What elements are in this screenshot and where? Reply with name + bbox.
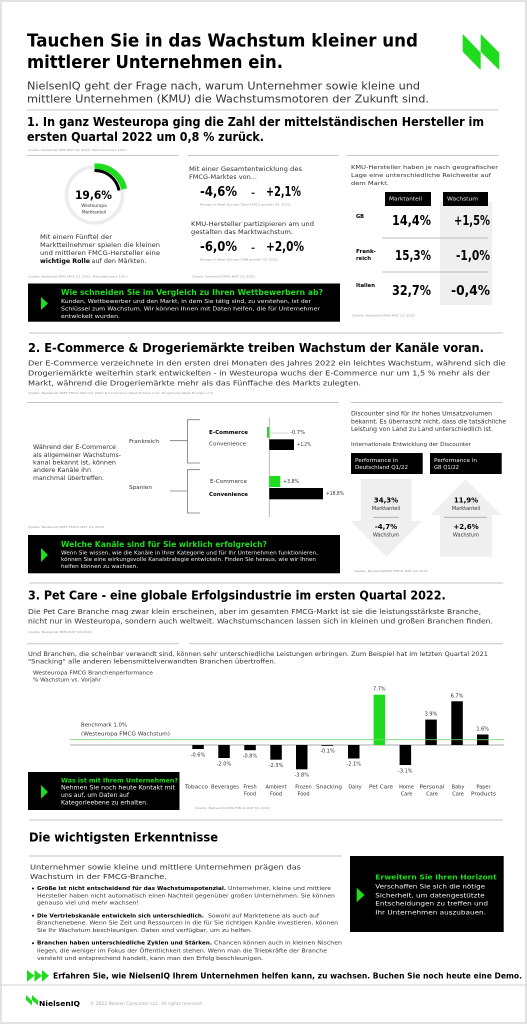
panel: market share donut: Quelle: NielsenIQ RMS MAT Q1 2022, Manufacturers 100+ (28, 274, 129, 278)
text block: takeaways intro (30, 864, 301, 881)
panel: discounters: Marktanteil (372, 506, 400, 512)
callout: channels: können Sie eine wirkungsvolle Kanalstrategie entwickeln. Finden Sie heraus, wie wir Ihnen (61, 557, 316, 563)
chart: sector performance: 3.9% (425, 712, 438, 718)
chart: sector performance: (Westeuropa FMCG Wachstum) (81, 732, 170, 738)
chart: sector performance: -0.8% (243, 753, 257, 759)
panel: FMCG growth ranges: -6,0% (200, 240, 237, 255)
panel: discounters: +2,6% (453, 523, 479, 531)
chart: sector performance: Ambient (265, 784, 287, 790)
panel: country table: KMU-Hersteller haben je nach geografischer (351, 165, 499, 171)
panel: market share donut: Westeuropa (81, 203, 107, 209)
panel: discounters: Internationale Entwicklung der Discounter (351, 442, 472, 448)
chart: sector performance: -2.3% (269, 763, 283, 769)
panel: discounters: Leistung von Land zu Land unterschiedlich ist. (351, 427, 493, 433)
chart: sector performance: Fresh (243, 784, 257, 790)
panel: FMCG growth ranges: +2,1% (266, 185, 301, 200)
list: takeaway 3 (32, 941, 342, 962)
panel: country table: Lage eine unterschiedliche Reichweite auf (351, 173, 492, 179)
chart: channel growth by country: -0.7% (290, 430, 305, 436)
chart: sector performance: Baby (452, 784, 464, 790)
chart: channel growth by country: Frankreich (129, 439, 160, 445)
list: takeaway 2: Die Vertriebskanäle entwickeln sich unterschiedlich. (37, 913, 204, 919)
chart: channel growth by country: +18.8% (326, 491, 344, 497)
chart: sector performance: Products (471, 791, 496, 797)
chart: sector performance: Food (244, 791, 256, 797)
chart: channel growth by country: Convenience (209, 492, 249, 498)
panel: discounters: Discounter sind für ihr hohes Umsatzvolumen (351, 412, 492, 418)
text block: market share: Marktteilnehmer spielen die kleinen (40, 242, 160, 249)
title: Tauchen Sie in das Wachstum kleiner und (27, 32, 418, 52)
panel: discounters: Wachstum (453, 533, 479, 539)
list: takeaway 1: Größe ist nicht entscheidend für das Wachstumspotenzial. (37, 886, 226, 892)
panel: discounters: Performance in (434, 458, 477, 464)
subtitle: NielsenIQ geht der Frage nach, warum Unternehmer sowie kleine und (27, 80, 420, 92)
chart: sector performance: Benchmark 1.0% (81, 723, 127, 729)
source: chart: Quelle: NielsenIQ RMS FMCG MAT Q1 2022 (195, 806, 270, 810)
text block: section 2 intro: Drogeriemärkte weiterhin stark entwickelten - in Westeuropa wuchs der E-Commerce nur um 1,5 % mehr als der (28, 370, 490, 378)
panel: country table: +1,5% (454, 214, 490, 229)
panel: country table: Italien (356, 283, 376, 289)
heading: section 2: 2. E-Commerce & Drogeriemärkte treiben Wachstum der Kanäle voran. (28, 340, 484, 355)
chart: sector performance: % Wachstum vs. Vorjahr (33, 678, 102, 684)
text block: channels: manchmal übertreffen. (33, 476, 104, 482)
list: takeaway 3: liegen, die weniger im Fokus der Öffentlichkeit stehen. Wenn man die Triebkräfte der Branche (37, 947, 328, 954)
icon: NielsenIQ logo mark (463, 34, 499, 70)
chart: channel growth by country: +1.2% (297, 442, 311, 448)
title (27, 32, 418, 73)
text block: section 2 intro (28, 360, 506, 388)
panel: country table: Marktanteil (389, 196, 422, 202)
callout: your business: uns auf, um Daten auf (61, 793, 130, 799)
callout: channels: Welche Kanäle sind für Sie wirklich erfolgreich? (61, 540, 267, 549)
panel: discounters: Marktanteil (452, 506, 480, 512)
callout: broaden horizon: Entscheidungen zu treffen und (375, 900, 488, 908)
heading: section 1 (27, 114, 484, 144)
copyright: © 2022 Nielsen Consumer LLC. All rights reserved. (90, 1001, 203, 1006)
text block: market share (40, 234, 160, 265)
chart: channel growth by country: Convenience (209, 441, 246, 447)
list: takeaway 1: Unternehmer, kleine und mittlere (228, 886, 332, 892)
chart: sector performance: -3.1% (398, 768, 413, 774)
callout: your business: Kategorieebene zu erhalten. (61, 800, 148, 806)
title: mittlerer Unternehmen ein. (27, 53, 283, 73)
callout: channels: Wenn Sie wissen, wie die Kanäle in Ihrer Kategorie und für Ihr Unternehmen funktionieren, (61, 550, 318, 556)
chart: channel growth by country: E-Commerce (209, 430, 249, 436)
panel: discounters: GB Q1/22 (434, 465, 459, 471)
panel: FMCG growth ranges: Quelle: NielsenIQ RMS MAT Q1 2022 (192, 274, 255, 278)
source: section 2: Quelle: NielsenIQ RMS FMCG MAT Q1 2022 E-Commerce West Europe n=5, Drugstores West Europe n=5 (28, 391, 213, 395)
list: takeaway 1: genauso viel und mehr wachsen! (37, 901, 139, 907)
callout: competitors: Wie schneiden Sie im Vergleich zu Ihren Wettbewerbern ab? (61, 288, 323, 297)
callout: competitors: entwickelt wurden. (61, 314, 120, 320)
panel: discounters: 34,3% (374, 497, 398, 505)
chart: sector performance: Beverages (211, 784, 239, 790)
list: takeaway 3: Chancen können auch in kleinen Nischen (214, 941, 342, 947)
chart: sector performance: -2.1% (346, 762, 361, 768)
callout: channels (28, 535, 340, 573)
arrow: up (431, 479, 501, 557)
chart: sector performance: Personal (420, 784, 444, 790)
panel: country table: Wachstum (447, 196, 478, 202)
panel: FMCG growth ranges: -4,6% (200, 185, 237, 200)
chart: sector performance: Snacking (316, 784, 342, 790)
panel: discounters (351, 412, 506, 573)
list: takeaway 2: Sie Ihr Wachstum beschleunigen. Daten sind verfügbar, um zu helfen. (37, 928, 252, 934)
panel: discounters: 11,9% (454, 497, 478, 505)
source: channels: Quelle: NielsenIQ RMS FMCG MAT Q1 2022 (28, 525, 104, 529)
text block: section 3 intro: nicht nur in Westeuropa, sondern auch weltweit. Wachstumschancen lassen sich in kleinen und großen Branchen finden. (28, 618, 493, 626)
panel: FMCG growth ranges: KMU-Hersteller partizipieren am und (191, 221, 314, 228)
arrow: down (351, 479, 422, 557)
chart: sector performance: Pet Care (369, 784, 393, 790)
panel: country table: GB (356, 214, 364, 220)
list: takeaway 3: versteht und entsprechend handelt, kann man den Erfolg beschleunigen. (37, 956, 263, 962)
panel: country table: Frank- (356, 249, 376, 255)
text block: takeaways intro: Unternehmer sowie kleine und mittlere Unternehmen prägen das (30, 864, 301, 872)
panel: country table: reich (356, 256, 372, 262)
chart: sector performance: -0.6% (191, 752, 205, 758)
text block: market share: und mittleren FMCG-Hersteller eine (40, 250, 160, 257)
panel: country table: 32,7% (392, 284, 431, 299)
text block: section 3 intro: Die Pet Care Branche mag zwar klein erscheinen, aber im gesamten FMCG-Markt ist sie die leistungsstärkste Branche, (28, 608, 481, 616)
source: section 3: Quelle: NielsenIQ RMS MAT Q4 2021 (28, 630, 92, 634)
text block: market share: auf den Märkten. (92, 258, 147, 265)
panel: discounters: -4,7% (375, 523, 397, 531)
heading: key takeaways: Die wichtigsten Erkenntnisse (29, 829, 218, 844)
chart: channel growth by country: +3.8% (283, 479, 299, 485)
panel: FMCG growth ranges (189, 166, 314, 278)
callout: your business (28, 772, 180, 810)
chart: sector performance (33, 670, 504, 797)
panel: discounters: Quelle: NielsenIQRMS FMCG MAT Q1 2022 (354, 569, 428, 573)
text block: takeaways intro: Wachstum in der FMCG-Branche. (30, 873, 167, 881)
chart: channel growth by country (129, 418, 344, 517)
text block: section 2 intro: Markt, während die Drogeriemärkte mehr als das Fünffache des Markts zulegten. (28, 380, 361, 388)
panel: market share donut: 19,6% (75, 188, 112, 202)
list: takeaway 2: Sowohl auf Marktebene als auch auf (208, 913, 319, 919)
text block: market share: wichtige Rolle (40, 258, 90, 265)
chart: channel growth by country: E-Commerce (210, 479, 247, 485)
panel: country table: -1,0% (456, 249, 490, 264)
callout: broaden horizon: Erweitern Sie Ihren Horizont (375, 873, 497, 881)
donut chart (66, 166, 124, 223)
chart: sector performance: Tobacco (184, 784, 208, 790)
text block: channels: kanal bekannt ist, können (33, 461, 116, 467)
text block: channels: Während der E-Commerce (33, 445, 116, 451)
text block: channels (33, 445, 121, 482)
chart: sector performance: Care (452, 791, 464, 797)
heading: section 1: ersten Quartal 2022 um 0,8 % zurück. (27, 129, 264, 144)
chart: sector performance: Care (401, 791, 412, 797)
footer logo (26, 995, 80, 1008)
list: takeaway 2: Branchenebene. Wenn Sie Zeit und Ressourcen in die für Sie richtigen Kanäle investieren, können (37, 921, 338, 927)
panel: country table: -0,4% (451, 284, 490, 299)
subtitle (27, 80, 429, 106)
callout: broaden horizon (350, 856, 504, 932)
panel: FMCG growth ranges: - (251, 188, 255, 199)
chart: sector performance: 7.7% (373, 687, 386, 693)
chart: sector performance: -0.1% (320, 749, 335, 755)
callout: your business: Nehmen Sie noch heute Kontakt mit (61, 786, 176, 792)
panel: market share donut: Marktanteil (82, 210, 106, 216)
callout: broaden horizon: Verschaffen Sie sich die nötige (375, 882, 485, 890)
text block: channels: als allgemeiner Wachstums- (33, 453, 121, 459)
panel: market share donut (28, 166, 160, 278)
callout: competitors: Schlüssel zum Wachstum. Wir können Ihnen mit Daten helfen, die für Unternehmer (61, 306, 321, 312)
icon: triple arrows (27, 970, 49, 982)
chart: sector performance: Food (298, 791, 310, 797)
chart: sector performance: -2.0% (217, 761, 231, 767)
chart: sector performance: 6.7% (451, 693, 464, 699)
footer logo: NielsenIQ (39, 999, 80, 1008)
chart: sector performance: Home (399, 784, 414, 790)
text block: section 3 intro (28, 608, 493, 626)
call to action: Erfahren Sie, wie NielsenIQ Ihrem Unternehmen helfen kann, zu wachsen. Buchen Sie noch heute eine Demo. (53, 972, 522, 981)
chart: sector performance: Frozen (295, 784, 312, 790)
callout: your business: Was ist mit Ihrem Unternehmen? (61, 777, 179, 784)
panel: FMCG growth ranges: Range of West Europe Total FMCG growth Q1 2022 (200, 202, 290, 206)
panel: FMCG growth ranges: FMCG-Marktes von... (189, 174, 257, 181)
text block: section 3 body (28, 651, 488, 666)
panel: discounters: Deutschland Q1/22 (355, 465, 408, 471)
panel: country table: Quelle: NielsenIQ RMS MAT Q1 2022 (352, 314, 415, 318)
heading: section 1: 1. In ganz Westeuropa ging die Zahl der mittelständischen Hersteller im (27, 114, 484, 129)
list: takeaway 1 (32, 886, 335, 907)
callout: channels: helfen können zu wachsen. (61, 564, 138, 570)
panel: discounters: Performance in (355, 458, 398, 464)
text block: channels: andere Kanäle ihn (33, 468, 91, 474)
panel: discounters: bekannt. Es überrascht nicht, dass die tatsächliche (351, 419, 506, 425)
text block: section 3 body: "Snacking" alle anderen lebensmittelverwandten Branchen übertroffen. (28, 659, 276, 666)
callout: competitors: Kunden, Wettbewerber und den Markt, in dem Sie tätig sind, zu verstehen, ist der (61, 299, 312, 305)
callout: broaden horizon: Ihr Unternehmen auszubauen. (375, 909, 486, 917)
text block: section 3 body: Und Branchen, die scheinbar verwandt sind, können sehr unterschiedliche Leistungen erbringen. Zum Beispiel hat im letzten Quartal 2021 (28, 651, 488, 658)
panel: country table: 14,4% (392, 214, 431, 229)
chart: sector performance: -3.8% (294, 773, 309, 779)
callout: broaden horizon: Sicherheit, um datengestützte (375, 891, 485, 899)
source: section 1: Quelle: NielsenIQ RMS MAT Q1 2022, Manufacturers 100+ (28, 148, 128, 152)
text block: section 2 intro: Der E-Commerce verzeichnete in den ersten drei Monaten des Jahres 2022 ein leichtes Wachstum, während sich die (28, 360, 506, 368)
panel: country table: dem Markt. (351, 181, 389, 187)
panel: FMCG growth ranges: - (251, 243, 255, 254)
panel: FMCG growth ranges: gestalten das Marktwachstum. (191, 229, 293, 236)
chart: sector performance: Food (270, 791, 282, 797)
panel: FMCG growth ranges: +2,0% (266, 240, 304, 255)
panel: FMCG growth ranges: Range of West Europe SMB growth Q1 2022 (200, 258, 278, 262)
subtitle: mittlere Unternehmen (KMU) die Wachstumsmotoren der Zukunft sind. (27, 94, 429, 106)
list: takeaway 1: Hersteller haben nicht automatisch einen Nachteil gegenüber großen Unternehmen. Sie können (37, 893, 335, 899)
chart: sector performance: Westeuropa FMCG Branchenperformance (33, 670, 154, 676)
heading: section 3: 3. Pet Care - eine globale Erfolgsindustrie im ersten Quartal 2022. (28, 588, 446, 603)
text block: market share: Mit einem Fünftel der (40, 234, 112, 241)
panel: country table (351, 165, 499, 318)
chart: sector performance: Paper (476, 784, 492, 790)
list: takeaway 3: Branchen haben unterschiedliche Zyklen und Stärken. (37, 941, 212, 947)
list: takeaway 2 (32, 913, 338, 934)
panel: discounters: Wachstum (373, 533, 399, 539)
chart: sector performance: Care (426, 791, 438, 797)
panel: FMCG growth ranges: Mit einer Gesamtentwicklung des (189, 166, 302, 173)
chart: sector performance: Dairy (348, 784, 362, 790)
callout: competitors (28, 284, 340, 322)
chart: sector performance: 1.6% (476, 727, 489, 733)
chart: channel growth by country: Spanien (129, 485, 153, 491)
panel: country table: 15,3% (395, 249, 431, 264)
